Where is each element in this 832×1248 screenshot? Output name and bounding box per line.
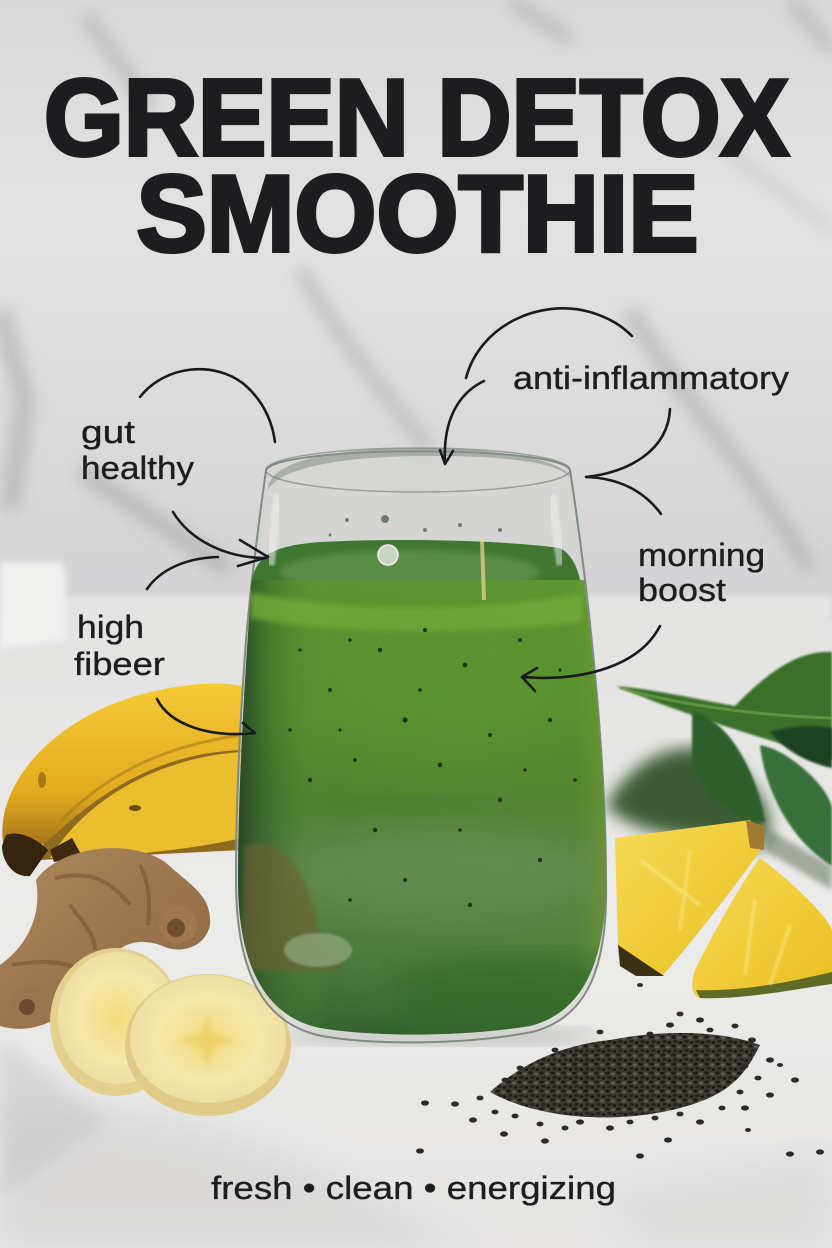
label: gut healthy [81, 414, 194, 486]
ginger root [0, 848, 210, 1029]
arrow: high fibeer curve to glass [147, 557, 218, 589]
marble countertop [0, 596, 832, 1248]
arrow: curve above anti-inflammatory [466, 308, 632, 378]
glass of green smoothie [230, 448, 620, 1045]
title: GREEN DETOX [44, 57, 789, 179]
glass body [236, 451, 606, 1042]
title: SMOOTHIE [136, 153, 698, 275]
label: high fibeer: fibeer [74, 646, 165, 682]
liquid body [230, 575, 620, 1045]
arrow: high fibeer lower [157, 699, 255, 734]
arrow: anti-inflammatory to glass rim [440, 381, 484, 464]
white container at left edge [0, 562, 66, 648]
label: gut healthy: gut [81, 414, 135, 450]
label: high fibeer: high [77, 609, 144, 645]
arrow: curve above gut healthy [140, 369, 275, 442]
label: morning boost [638, 537, 765, 608]
spinach leaves [606, 652, 832, 890]
arrow: anti-inflammatory to glass right [586, 409, 670, 477]
glass shadow on counter [280, 1027, 600, 1045]
pineapple chunks [615, 820, 832, 998]
glass highlights [482, 540, 484, 600]
bananas [2, 684, 242, 876]
arrow: gut healthy to glass [173, 512, 268, 566]
label: high fibeer [74, 609, 165, 682]
title [44, 57, 789, 275]
banana slices [50, 948, 291, 1116]
label: anti-inflammatory: anti-inflammatory [513, 360, 789, 396]
marble wall background [0, 0, 832, 620]
label: morning boost: morning [638, 537, 765, 573]
label: gut healthy: healthy [81, 450, 194, 486]
tagline: fresh • clean • energizing [211, 1170, 616, 1206]
chia seeds pile [416, 983, 824, 1159]
liquid top surface [250, 540, 582, 605]
arrow: morning boost upward [586, 477, 661, 514]
label: morning boost: boost [638, 572, 726, 608]
arrow: morning boost to smoothie [522, 626, 660, 691]
